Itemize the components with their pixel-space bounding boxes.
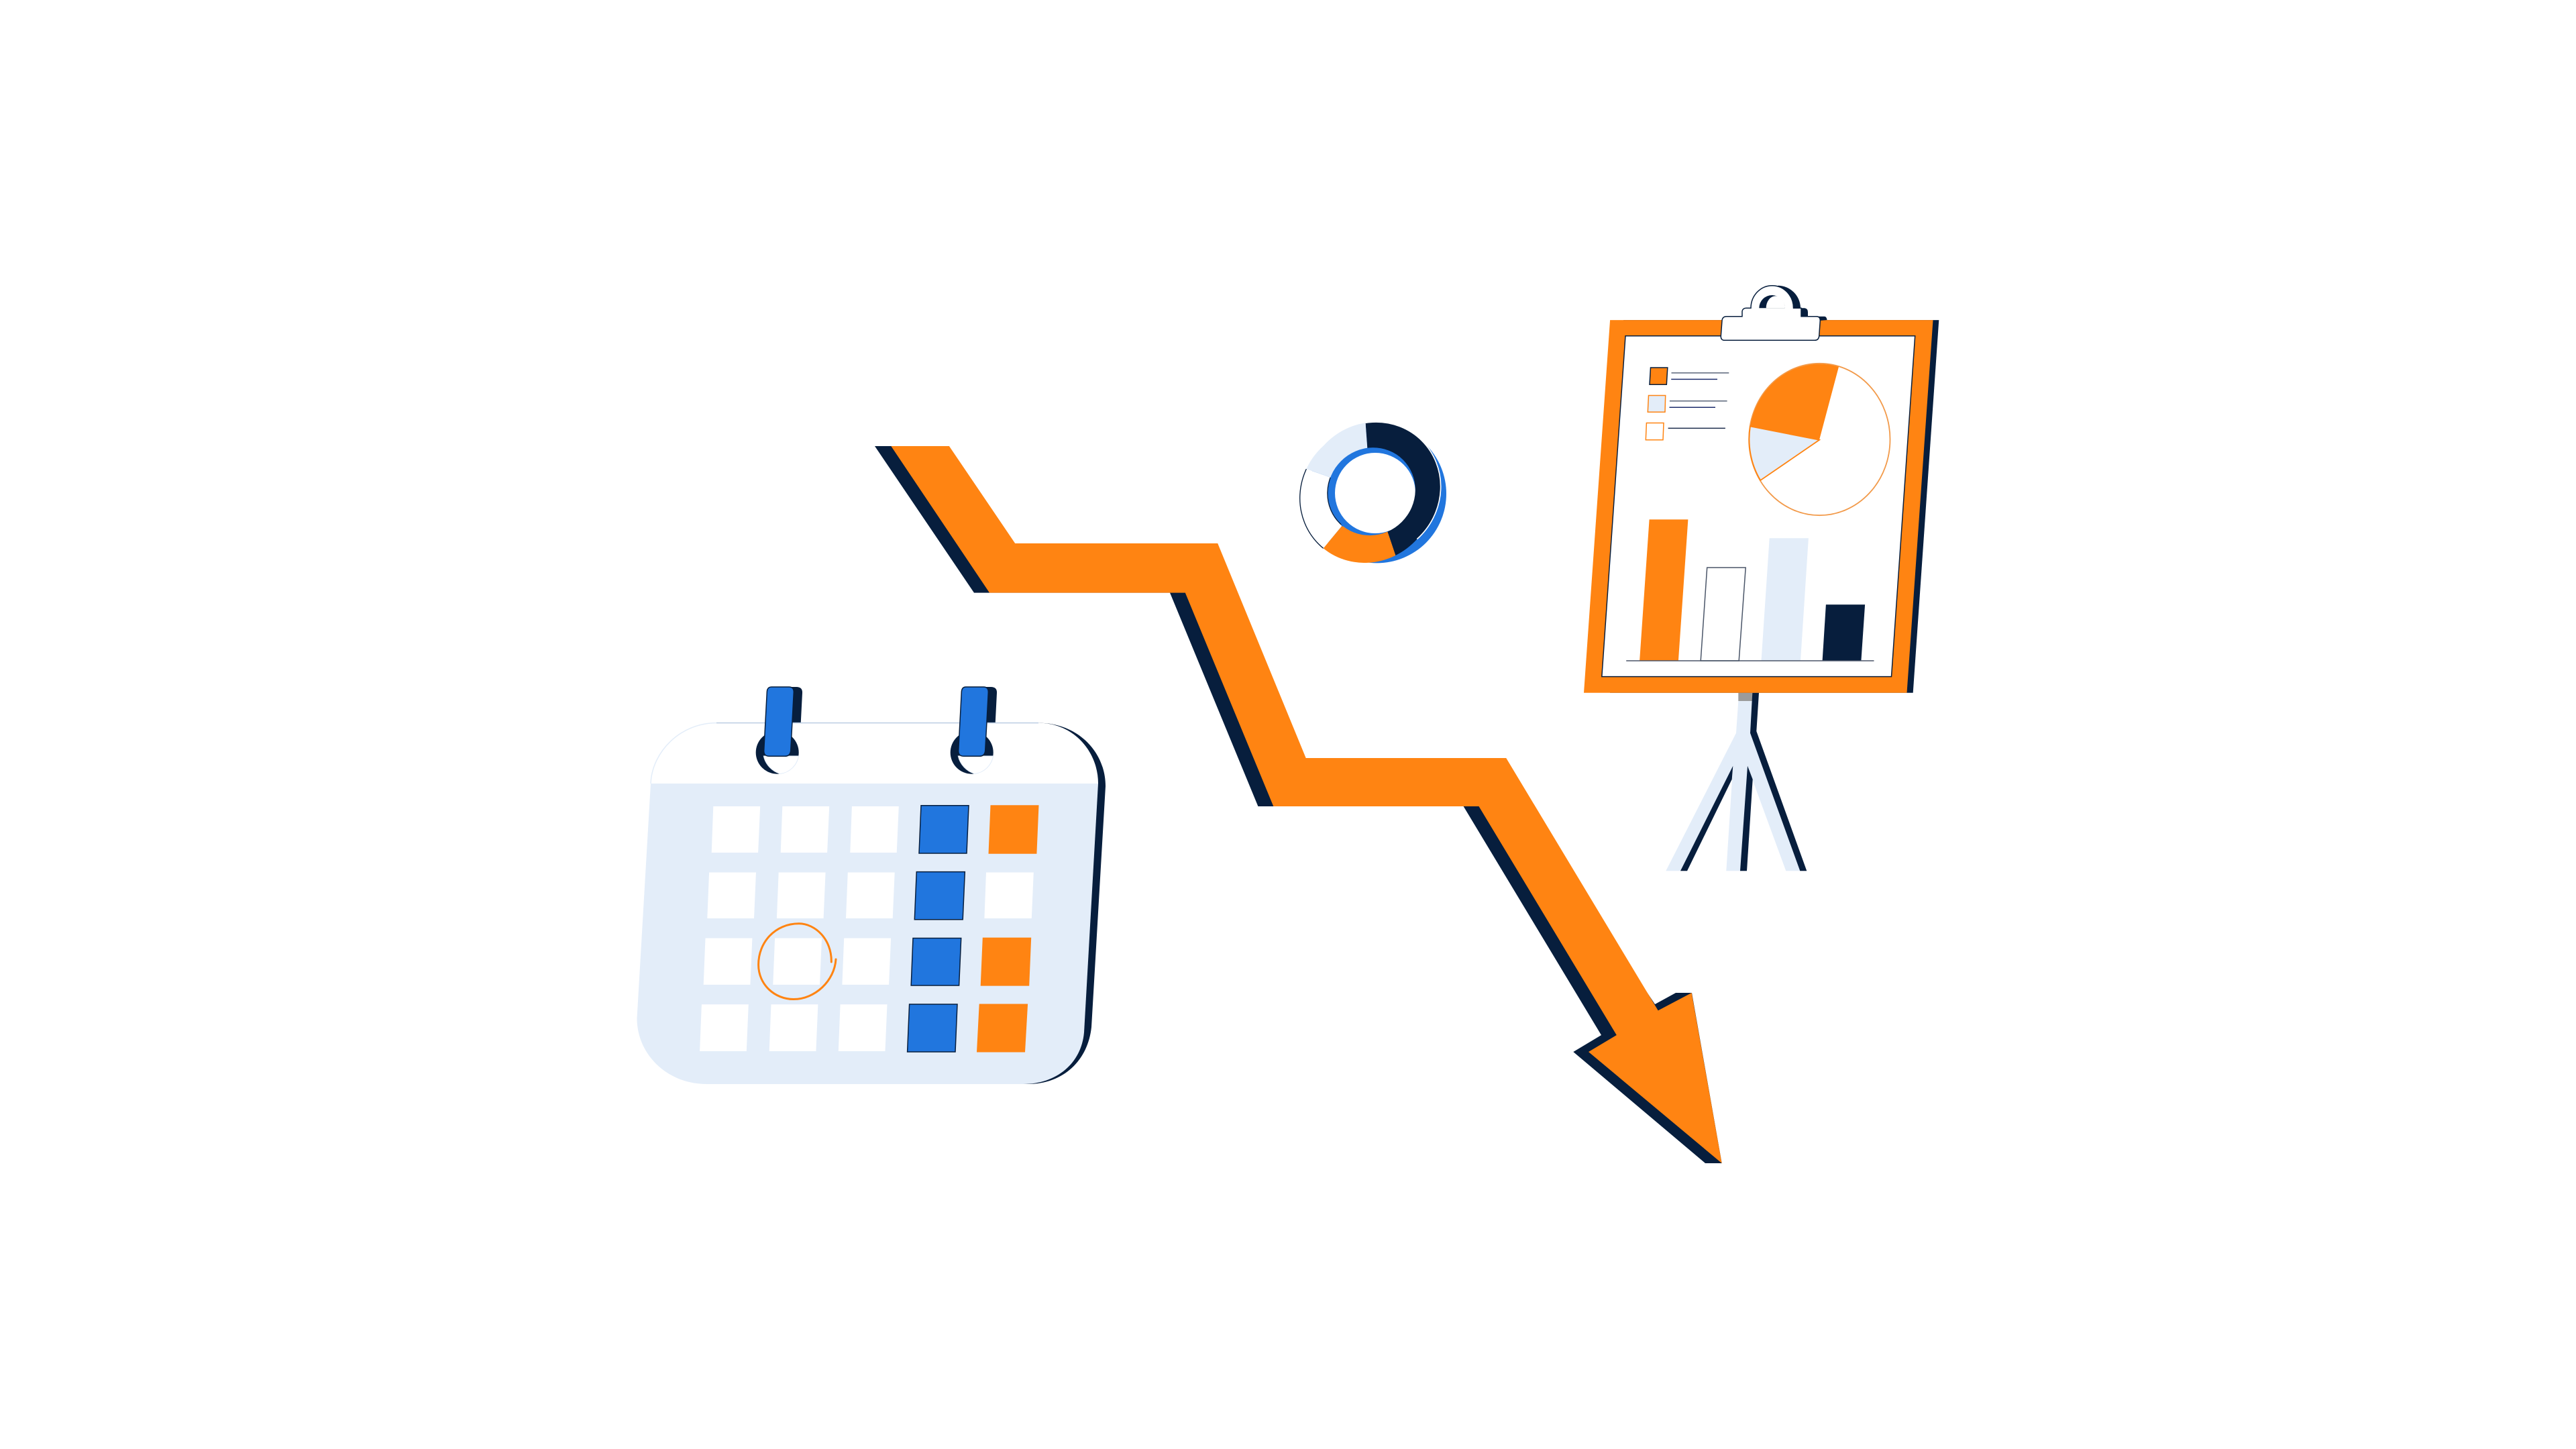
easel stand: [1666, 693, 1807, 871]
hand-drawn date circle: [759, 924, 836, 1000]
board frame: [1584, 320, 1933, 693]
donut segment: white: [1299, 468, 1342, 549]
donut blue backing ring: [1307, 425, 1446, 563]
arrow body: [891, 446, 1722, 1163]
pie chart: [1749, 364, 1890, 515]
illustration: [637, 285, 1939, 1163]
right binding ring: [951, 687, 994, 774]
blue date cells: [908, 806, 969, 1052]
donut segment: navy: [1366, 423, 1440, 555]
white date cells: [700, 806, 1034, 1051]
orange date cells: [977, 805, 1038, 1052]
board clip: [1721, 286, 1827, 340]
calendar: [637, 687, 1106, 1084]
clip shadows: [771, 687, 997, 726]
bar chart: [1626, 519, 1874, 661]
donut chart: [1300, 422, 1446, 563]
calendar body: [637, 784, 1098, 1084]
donut segment: light blue: [1307, 423, 1367, 478]
arrow shadow: [875, 446, 1722, 1163]
calendar shadow: [644, 723, 1106, 1084]
calendar header: [651, 723, 1098, 784]
left binding ring: [756, 687, 799, 774]
arrow: downward trend: [875, 446, 1722, 1163]
board paper: [1602, 336, 1915, 677]
presentation board: [1584, 286, 1939, 871]
board shadow: [1610, 320, 1939, 693]
legend: [1646, 368, 1729, 440]
donut segment: orange: [1323, 526, 1395, 563]
